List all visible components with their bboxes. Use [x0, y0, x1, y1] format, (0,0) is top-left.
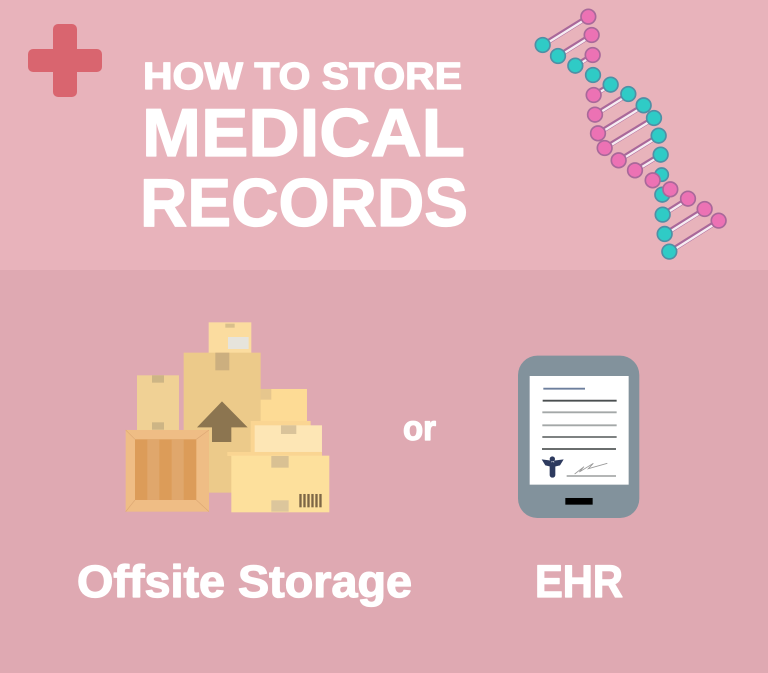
- box: right pale: [251, 421, 322, 454]
- title: MEDICAL: [142, 95, 465, 171]
- label: Offsite Storage: Offsite Storage: [77, 556, 412, 607]
- icon: medical cross: [28, 24, 102, 97]
- box: right upper: [260, 389, 307, 424]
- icon: DNA helix: [535, 9, 726, 259]
- label: EHR: EHR: [535, 556, 623, 607]
- box: bottom right: [227, 452, 329, 512]
- icon: EHR tablet: [518, 356, 639, 518]
- title: HOW TO STORE: [143, 56, 462, 98]
- icon: stacked boxes: [126, 322, 329, 512]
- label: or: or: [403, 409, 436, 448]
- panel: lower background: [0, 270, 768, 673]
- icon: caduceus: [542, 456, 564, 478]
- title: RECORDS: [140, 165, 468, 241]
- title: [140, 56, 468, 241]
- box: top small: [209, 322, 251, 353]
- box: left tall: [137, 375, 179, 432]
- crate: [126, 430, 209, 512]
- panel: header background: [0, 0, 768, 270]
- box: large centre with arrow: [184, 353, 261, 493]
